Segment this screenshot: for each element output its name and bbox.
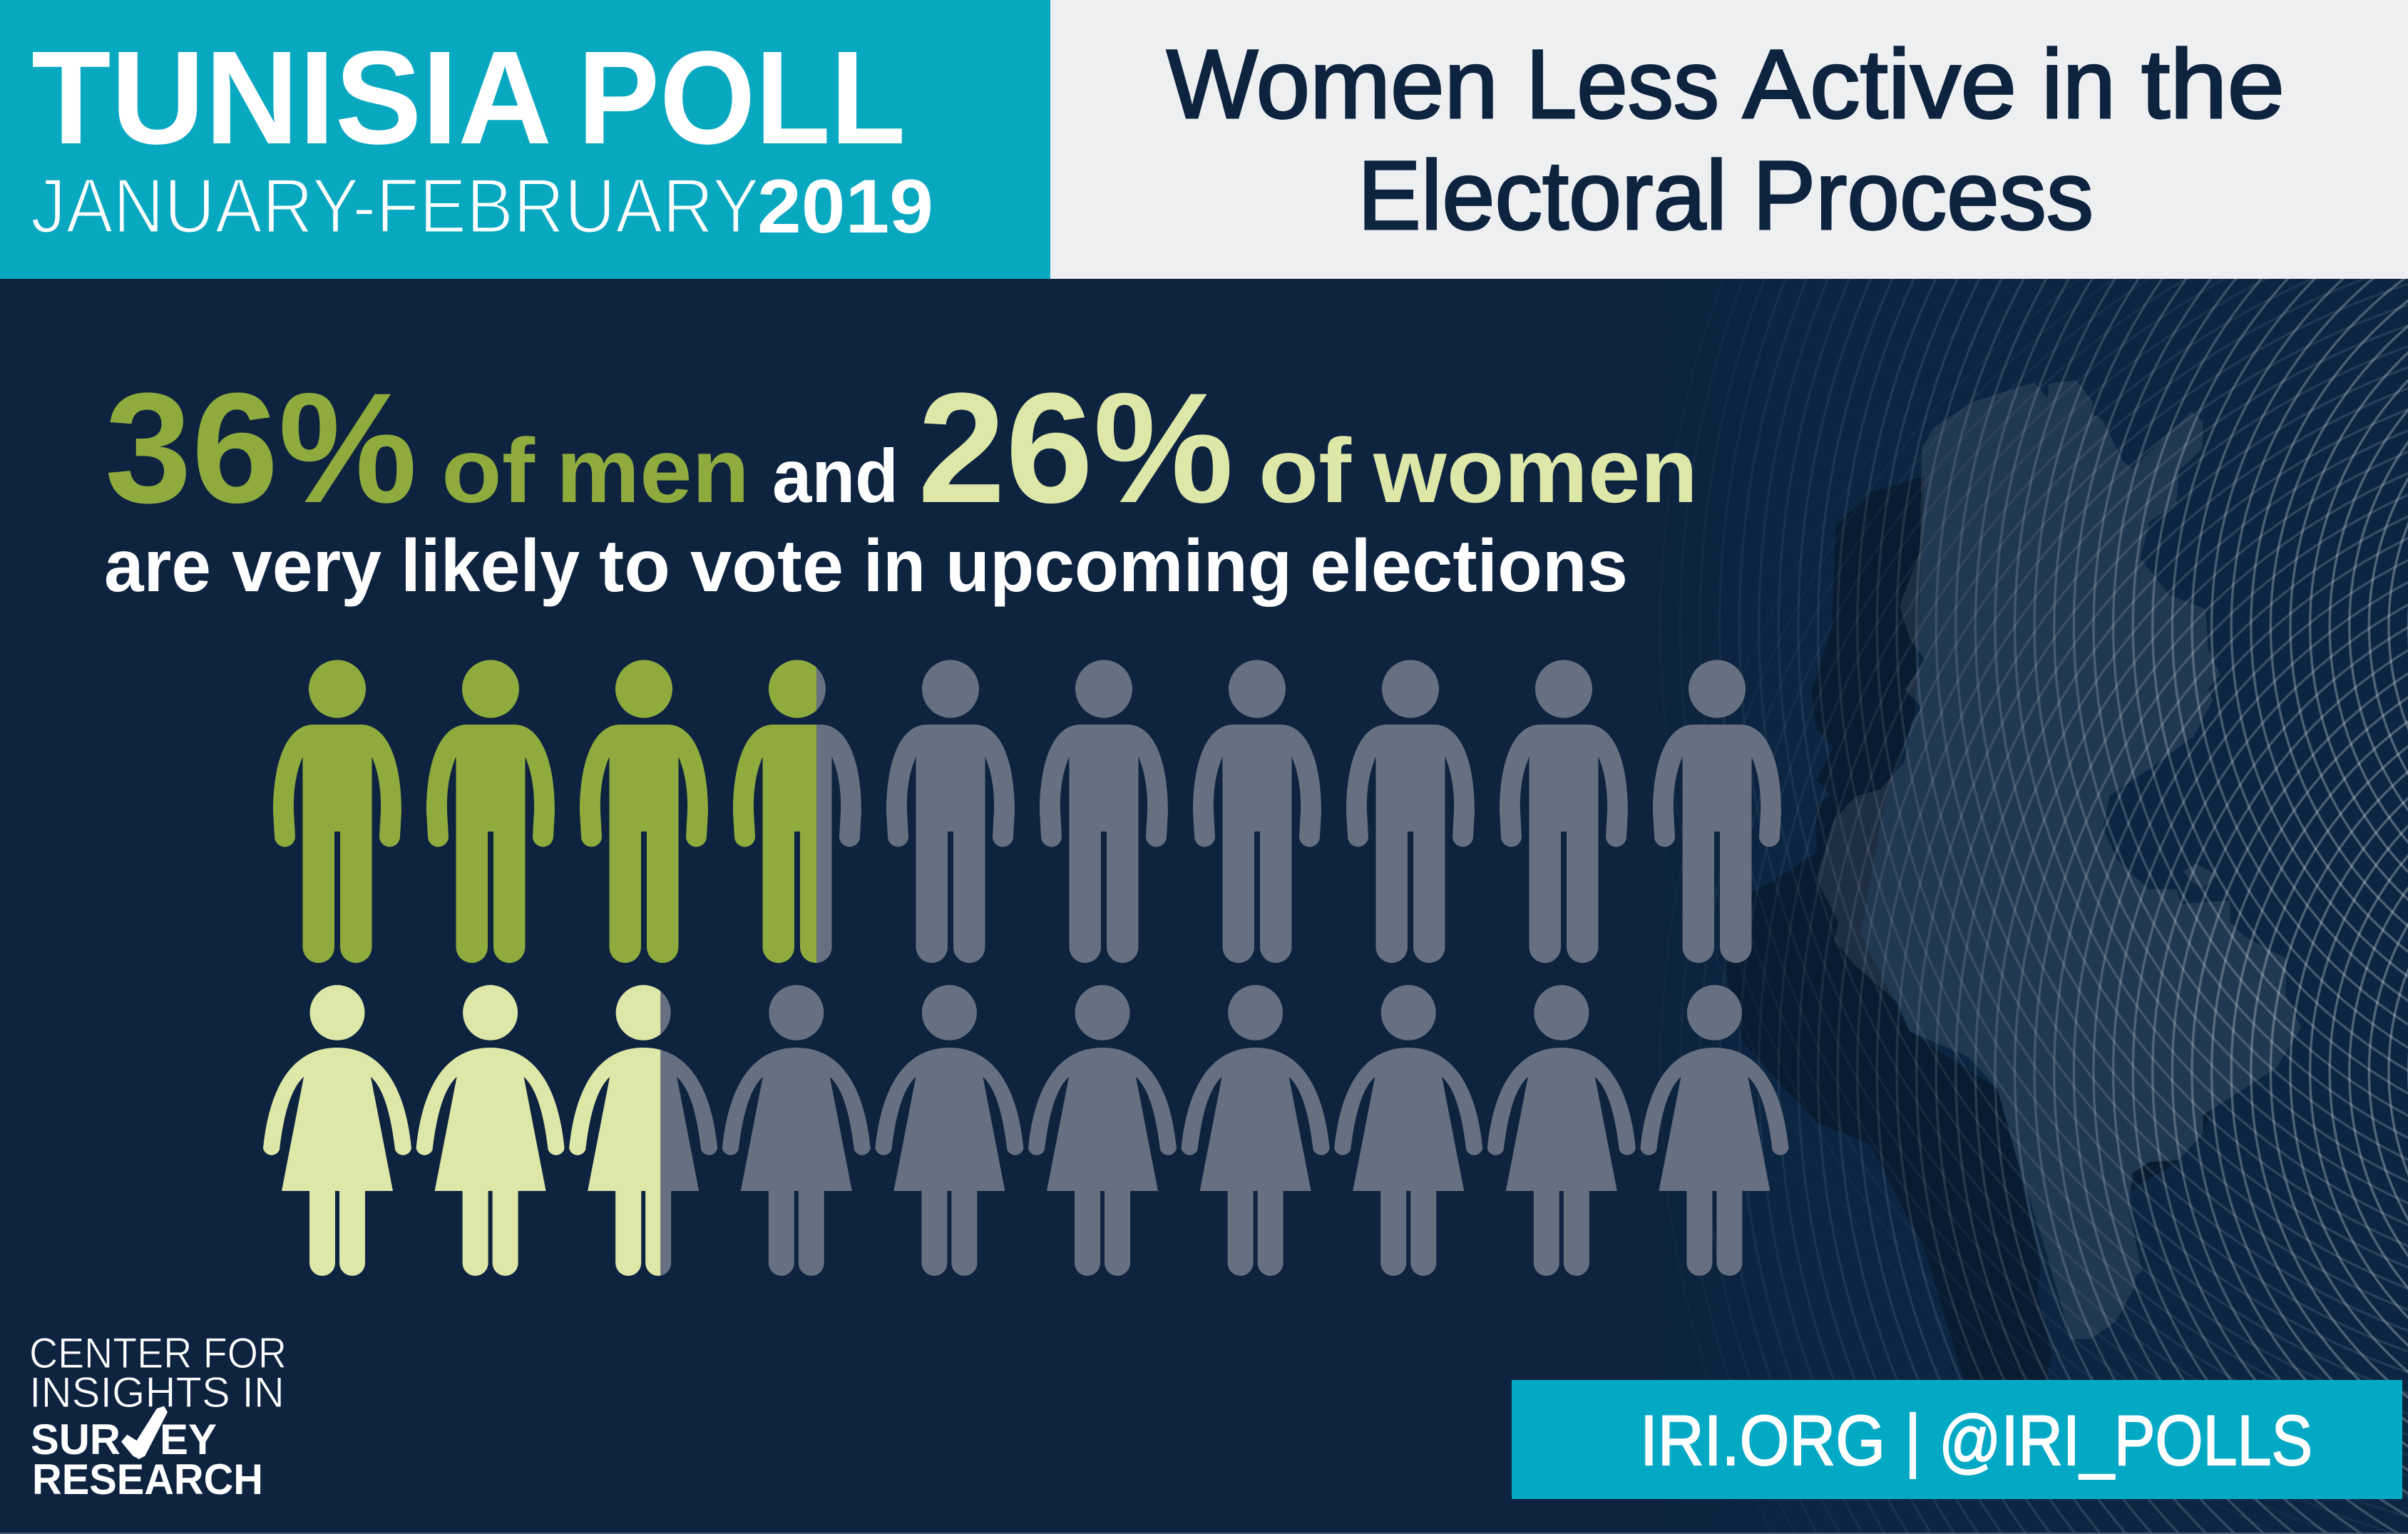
heading line 2: Process (1753, 141, 2094, 250)
heading line 1: in (2041, 30, 2116, 139)
panel: header left (0, 0, 1050, 279)
handle: @IRI_POLLS (1939, 1401, 2312, 1480)
pictogram: men row, 36% highlighted (273, 660, 1781, 963)
of men: men (556, 420, 749, 522)
map of Tunisia with shadow (1726, 380, 2301, 1384)
website: IRI.ORG (1640, 1401, 1885, 1480)
icon: check mark (121, 1406, 168, 1459)
heading line 1: Women (1167, 30, 1498, 139)
title word: POLL: POLL (578, 24, 906, 172)
heading line 1: Active (1743, 30, 2017, 139)
divider pipe (1910, 1412, 1916, 1479)
logo word: SUR: SUR (31, 1416, 121, 1463)
of men (441, 420, 749, 522)
sub line: likely (401, 525, 580, 608)
title word: TUNISIA: TUNISIA (31, 24, 552, 172)
sub line (104, 525, 1628, 608)
sub line: very (232, 525, 381, 608)
sub line: vote (690, 525, 844, 608)
sub line: in (864, 525, 926, 608)
panel: footer bar (1512, 1380, 2402, 1499)
headline text block (104, 360, 1698, 608)
concentric line pattern (1703, 279, 2408, 1533)
logo line 1: CENTER FOR (29, 1329, 287, 1377)
pictogram: women row, 26% highlighted (263, 985, 1788, 1276)
logo line 2: INSIGHTS IN (29, 1369, 285, 1416)
logo line 4: RESEARCH (32, 1456, 263, 1503)
subtitle: date: JANUARY-FEBRUARY (31, 163, 759, 250)
heading line 1: Less (1526, 30, 1719, 139)
36% statistic: 36% (105, 360, 417, 536)
panel: header right (1050, 0, 2408, 279)
of women: of (1259, 420, 1351, 522)
heading line 1 (1167, 30, 2285, 139)
sub line: are (104, 525, 211, 608)
and: and (772, 434, 898, 518)
of women: women (1373, 420, 1698, 522)
sub line: upcoming (946, 525, 1292, 608)
sub line: to (599, 525, 670, 608)
26% statistic: 26% (918, 360, 1234, 536)
logo word: EY: EY (160, 1416, 217, 1463)
heading line 2 (1358, 141, 2094, 250)
heading line 2: Electoral (1358, 141, 1727, 250)
logo: Center for Insights in Survey Research (29, 1329, 287, 1503)
of men: of (441, 420, 535, 522)
map of Tunisia (1816, 380, 2301, 1339)
map shadow (1726, 476, 2210, 1384)
heading line 1: the (2141, 30, 2285, 139)
subtitle: year: 2019 (757, 163, 933, 249)
sub line: elections (1310, 525, 1628, 608)
